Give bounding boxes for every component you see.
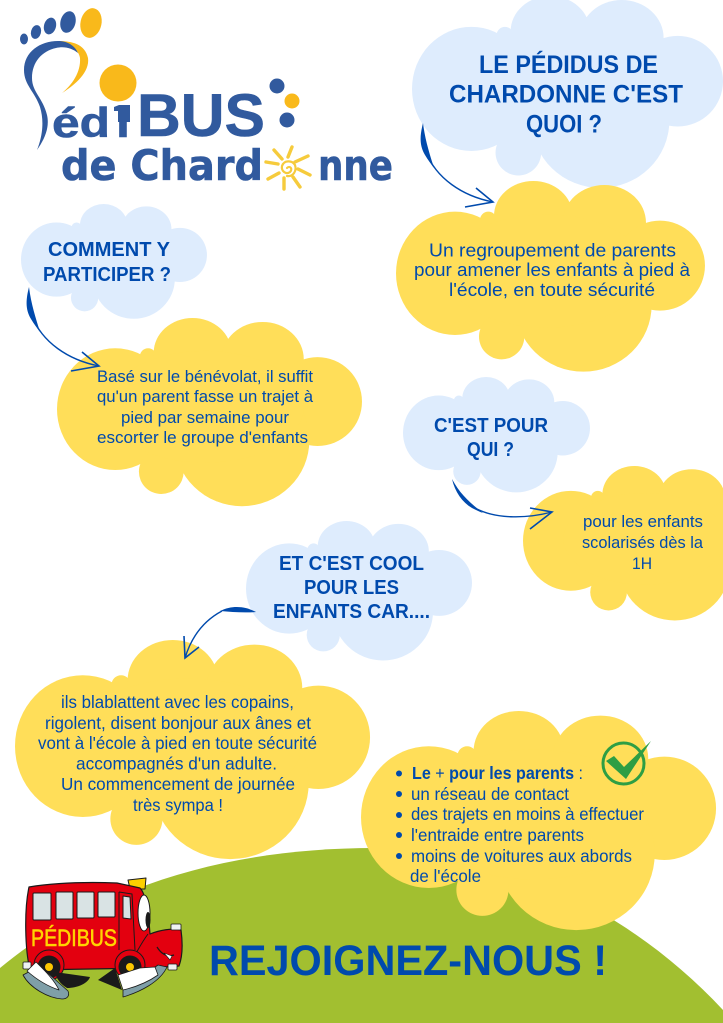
door	[119, 892, 135, 950]
body text: ils blablattent avec les copains,	[61, 692, 294, 712]
body text	[582, 513, 704, 573]
body text: Un regroupement de parents	[429, 240, 676, 260]
icon: green check mark	[603, 741, 651, 784]
rear wheel	[34, 950, 64, 980]
body text: escorter le groupe d'enfants	[97, 429, 308, 447]
heading text: QUI ?	[467, 439, 514, 461]
heading text: PARTICIPER ?	[43, 264, 171, 286]
smile	[157, 947, 174, 956]
green hill	[0, 848, 723, 1023]
heading text: LE PÉDIDUS DE	[479, 50, 658, 79]
body text: Basé sur le bénévolat, il suffit	[97, 368, 313, 386]
logo: Pédibus de Chardonne	[20, 6, 393, 190]
icon: orange sun disc	[100, 64, 136, 102]
bullet list: moins de voitures aux abords	[411, 846, 632, 866]
heading text: C'EST POUR	[434, 415, 549, 437]
heading text	[43, 239, 171, 286]
fender line	[135, 934, 148, 955]
front wheel	[115, 950, 145, 980]
word: edi: i	[116, 99, 130, 146]
icon: three dots	[270, 78, 300, 128]
arrow: second question to answer	[27, 287, 99, 371]
call to action: REJOIGNEZ-NOUS !	[209, 937, 607, 985]
cloud: participation answer	[57, 318, 362, 506]
icon: sun as the letter o	[266, 147, 310, 189]
body text: très sympa !	[133, 795, 223, 815]
icon: foot arch forming the letter P	[24, 41, 88, 150]
body text: accompagnés d'un adulte.	[76, 754, 277, 774]
illustration: red Pedibus bus	[23, 878, 182, 999]
bullet list: de l'école	[410, 866, 481, 886]
word: edi: éd	[52, 99, 110, 146]
word: de Chard: de Chard	[61, 141, 263, 190]
cloud: pour qui answer	[523, 466, 723, 620]
body text	[414, 240, 691, 300]
cloud: le pedibus question	[412, 0, 723, 188]
leg shadows	[55, 968, 122, 990]
arrow: third question to answer	[452, 479, 552, 529]
body text	[97, 368, 314, 447]
cloud: cool answer	[15, 640, 370, 859]
heading text: QUOI ?	[526, 110, 602, 138]
heading text: CHARDONNE C'EST	[449, 80, 683, 108]
heading text	[434, 415, 549, 461]
bullet list: des trajets en moins à effectuer	[411, 804, 644, 824]
body text: pied par semaine pour	[121, 409, 290, 427]
body text: pour amener les enfants à pied à	[414, 259, 691, 280]
body text: Un commencement de journée	[61, 774, 295, 794]
bus body	[26, 882, 182, 970]
word: nne: nne	[318, 141, 393, 190]
heading text: COMMENT Y	[48, 239, 171, 261]
body text: vont à l'école à pied en toute sécurité	[38, 733, 317, 753]
body text: l'école, en toute sécurité	[449, 279, 655, 300]
bullet list: un réseau de contact	[411, 784, 569, 804]
lettering: PÉDIBUS	[31, 925, 117, 952]
bullet list	[396, 763, 644, 886]
bullet list: Le + pour les parents :	[412, 763, 583, 783]
cloud: definition answer	[396, 181, 705, 372]
body text: 1H	[632, 555, 652, 573]
body text	[38, 692, 317, 815]
heading text: ET C'EST COOL	[279, 553, 424, 575]
arrow: first question to answer	[421, 123, 493, 207]
body text: pour les enfants	[583, 513, 703, 531]
body text: qu'un parent fasse un trajet à	[97, 388, 314, 406]
windows	[33, 892, 131, 920]
heading text: ENFANTS CAR....	[273, 601, 430, 623]
bumpers and headlight	[23, 924, 181, 970]
bullet list: l'entraide entre parents	[411, 825, 584, 845]
body text: scolarisés dès la	[582, 534, 704, 552]
word: edi	[52, 99, 130, 146]
heading text	[273, 553, 430, 623]
cloud: pour qui question	[403, 377, 590, 492]
heading text	[449, 50, 683, 138]
cloud: benefits for parents	[361, 711, 716, 930]
cloud: comment participer question	[21, 204, 207, 319]
heading text: POUR LES	[304, 577, 399, 599]
left sneaker	[23, 962, 69, 999]
arrow: fourth question to answer	[184, 607, 256, 658]
right sneaker	[118, 965, 167, 997]
body text: rigolent, disent bonjour aux ânes et	[45, 713, 311, 733]
icon: foot toes	[20, 6, 104, 44]
roof lamp	[128, 878, 146, 889]
eye	[138, 895, 150, 931]
word: BUS: BUS	[137, 82, 265, 149]
cloud: cool question	[246, 521, 472, 660]
